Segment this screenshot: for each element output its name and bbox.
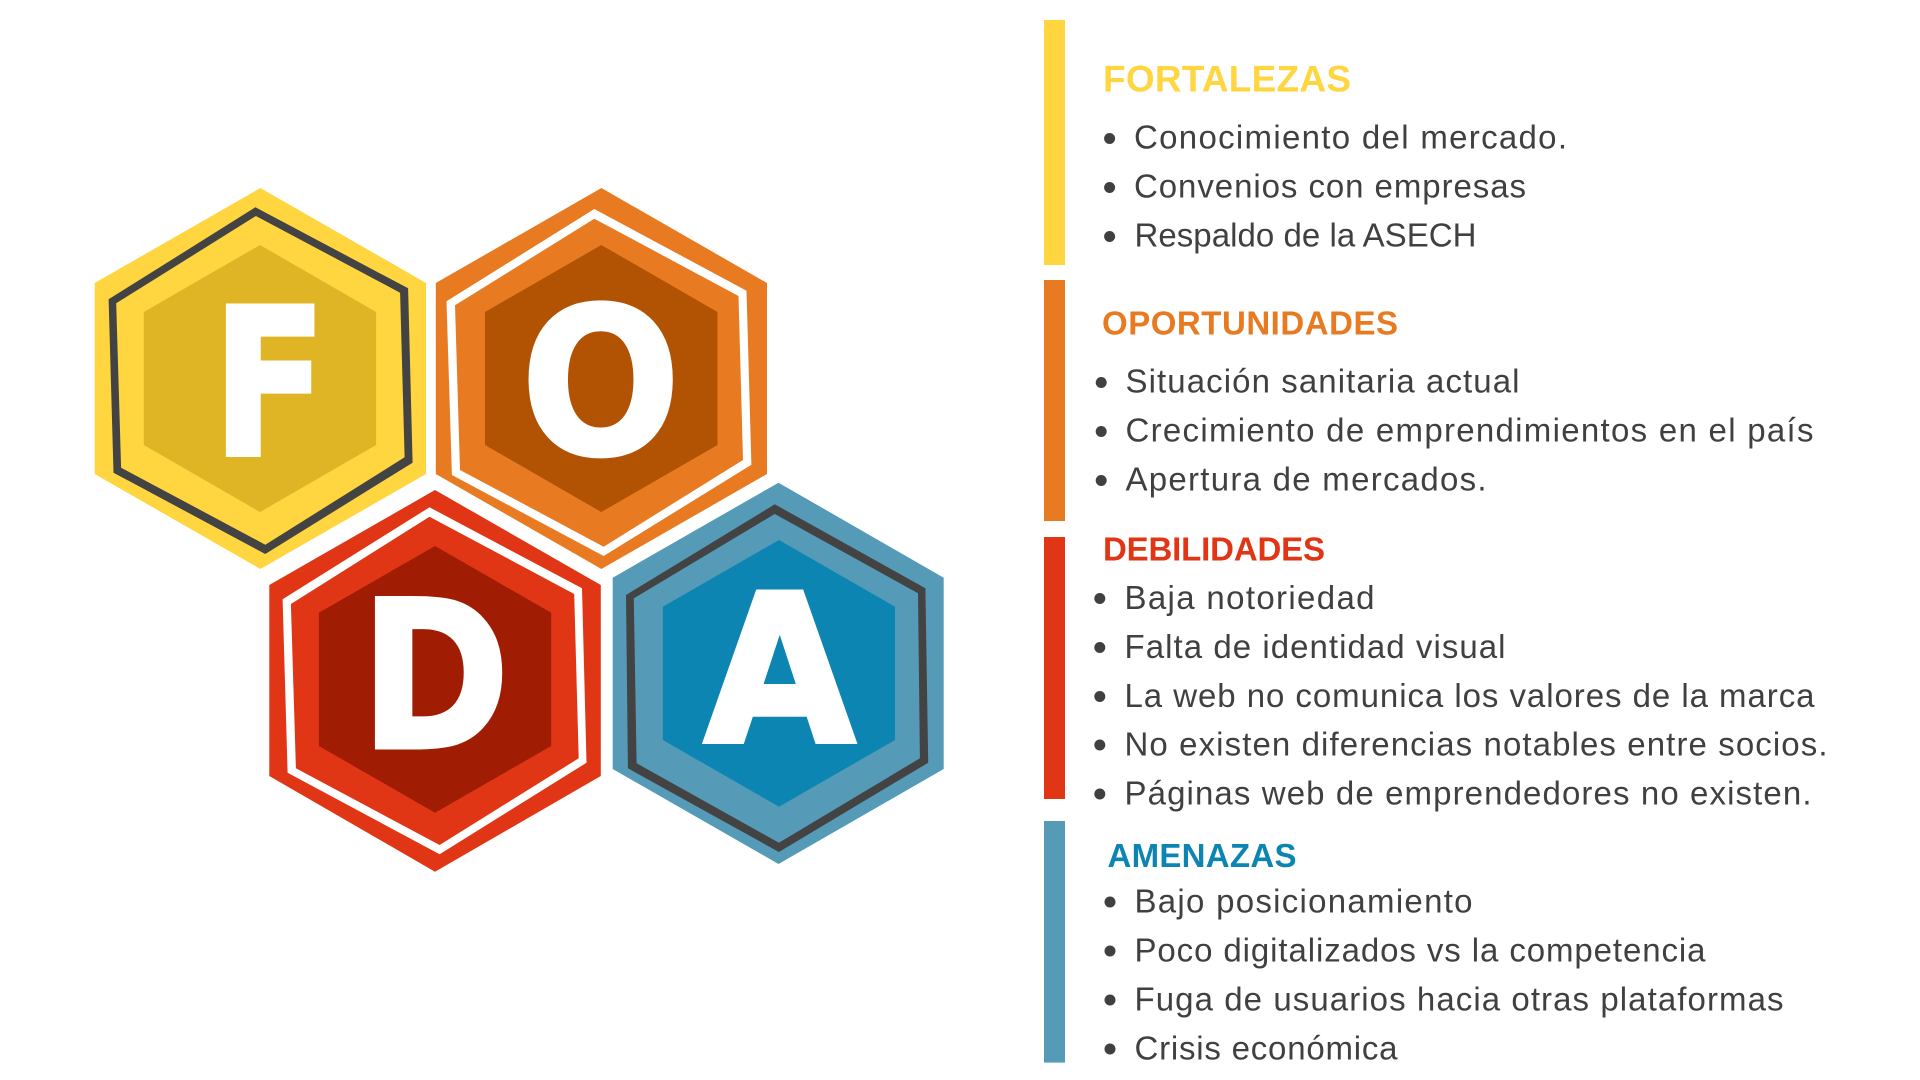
hexagon: O (oportunidades) [436,188,767,569]
bar: amenazas [1044,821,1065,1063]
list: debilidades: Baja notoriedad [1124,579,1374,616]
list: debilidades: No existen diferencias notables entre socios. [1124,726,1828,762]
list: oportunidades: Crecimiento de emprendimientos en el país [1126,412,1814,448]
list: amenazas: Fuga de usuarios hacia otras plataformas [1134,980,1784,1017]
list: amenazas: Crisis económica [1134,1030,1398,1066]
heading: amenazas: AMENAZAS [1108,837,1296,874]
list: fortalezas: Respaldo de la ASECH [1134,216,1476,254]
panel: amenazas [1044,821,1784,1066]
heading: debilidades: DEBILIDADES [1103,530,1325,568]
list: oportunidades: Situación sanitaria actual [1126,362,1520,400]
hexagon: A (amenazas) [613,483,944,864]
panel: debilidades [1044,530,1828,812]
bar: oportunidades [1044,280,1065,521]
hexagon: O (oportunidades): O [521,265,681,503]
list: amenazas: Poco digitalizados vs la competencia [1134,931,1706,968]
list: fortalezas [1104,118,1567,254]
panel: oportunidades [1044,280,1814,521]
list: fortalezas: Conocimiento del mercado. [1134,118,1567,156]
bar: debilidades [1044,537,1065,799]
list: debilidades: Páginas web de emprendedores no existen. [1124,774,1812,812]
heading: fortalezas: FORTALEZAS [1103,58,1351,99]
heading: oportunidades: OPORTUNIDADES [1102,305,1398,342]
bar: fortalezas [1044,20,1065,265]
list: debilidades: La web no comunica los valores de la marca [1124,677,1815,714]
panel: fortalezas [1044,20,1567,265]
hexagon: F (fortalezas): F [212,266,327,504]
hexagon: A (amenazas): A [704,552,855,791]
list: oportunidades: Apertura de mercados. [1126,460,1486,497]
hexagon: D (debilidades): D [360,557,510,796]
list: fortalezas: Convenios con empresas [1134,168,1526,204]
list: amenazas: Bajo posicionamiento [1134,882,1472,920]
hexagon: D (debilidades) [269,490,601,872]
list: amenazas [1104,882,1784,1066]
hexagon: F (fortalezas) [95,188,426,569]
list: debilidades [1094,579,1828,812]
list: oportunidades [1096,362,1814,497]
list: debilidades: Falta de identidad visual [1124,628,1506,665]
